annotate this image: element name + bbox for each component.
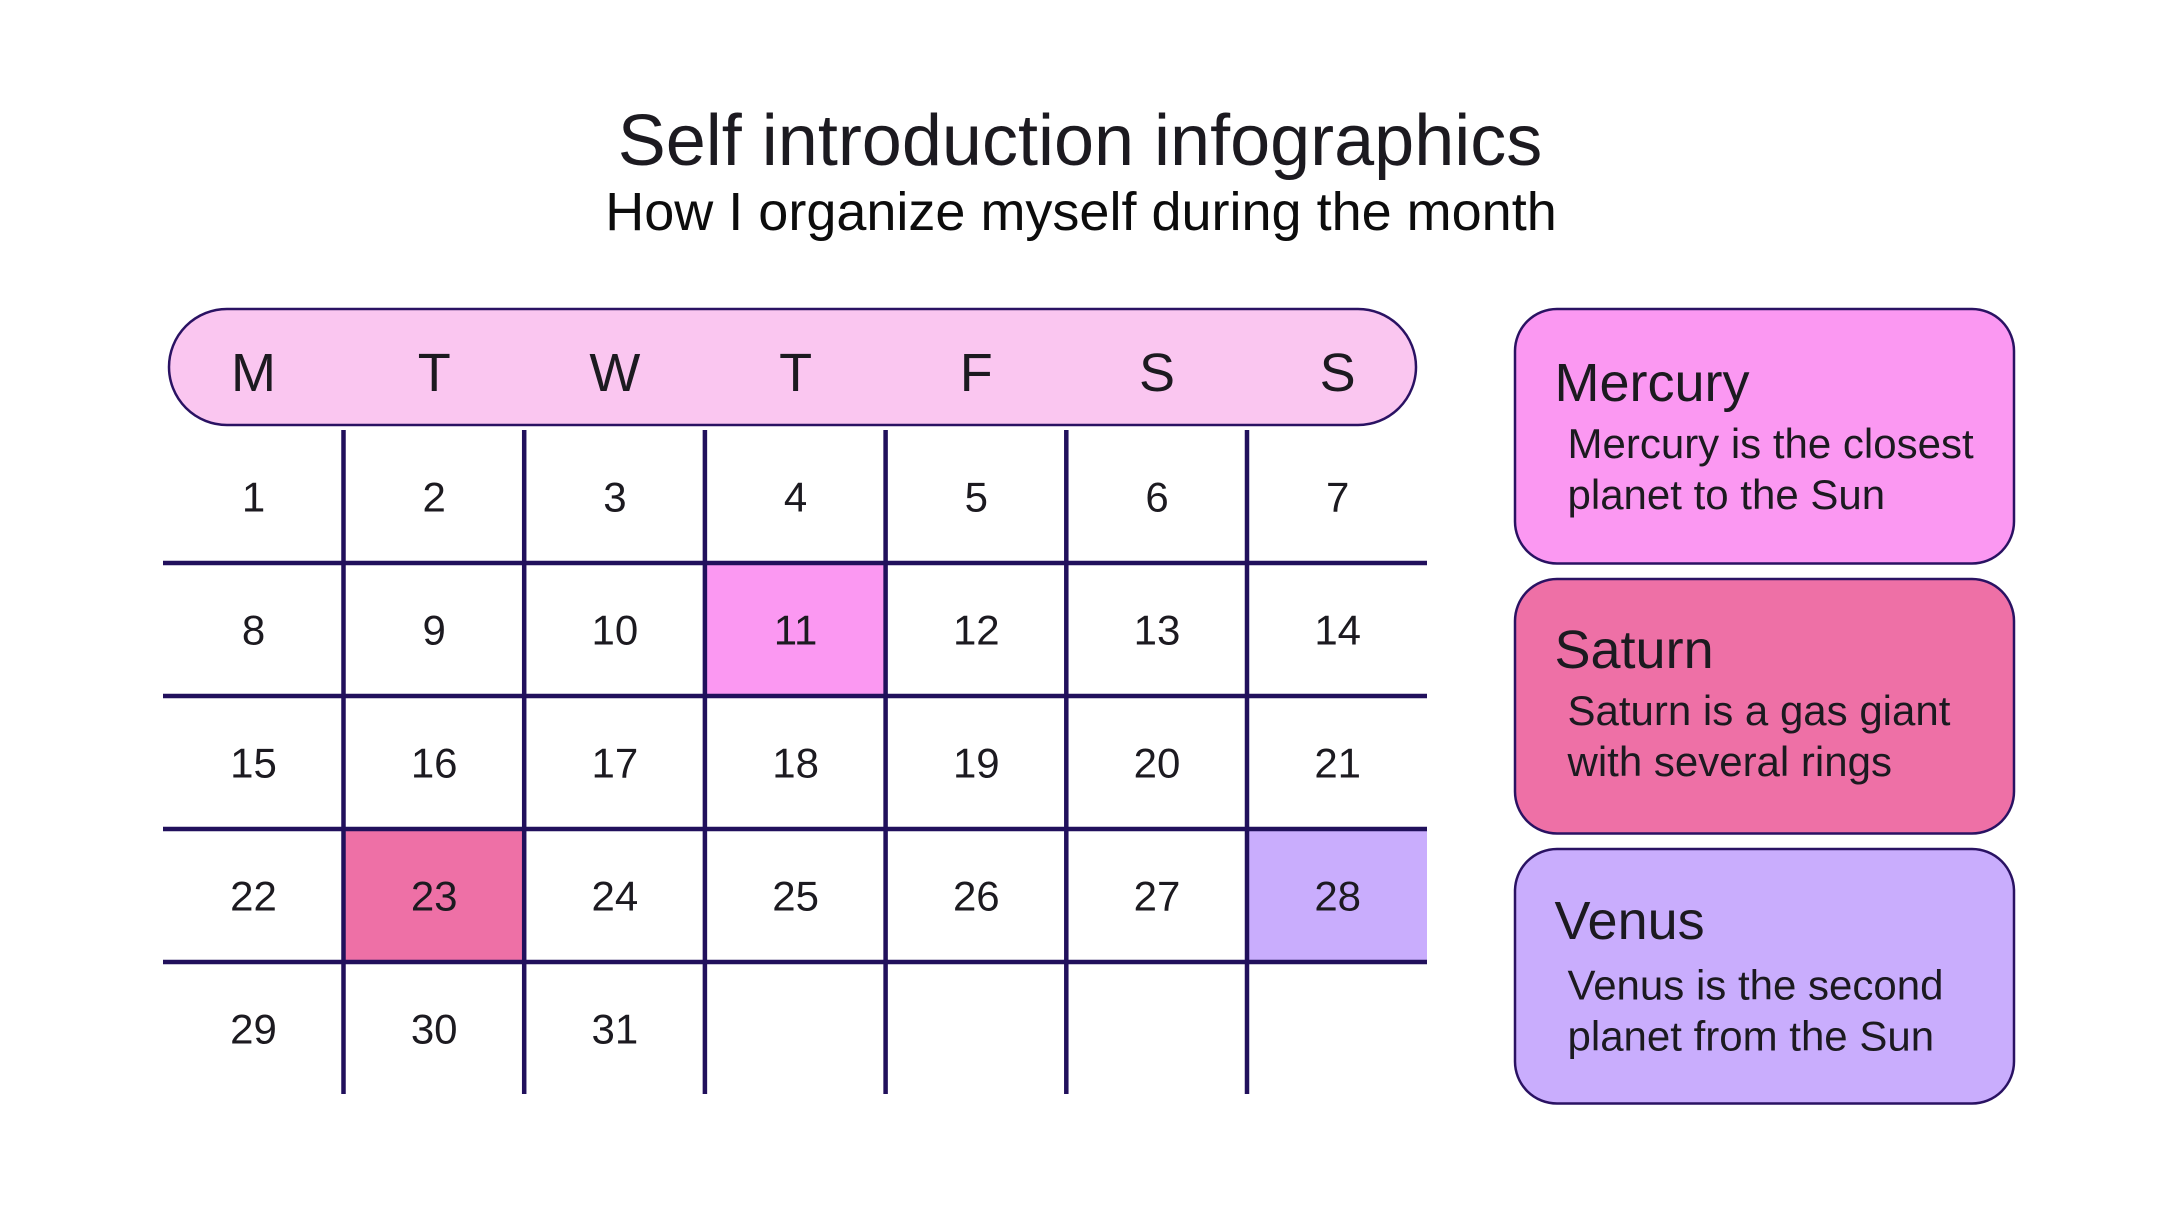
- day numbers: 17: [592, 740, 638, 786]
- weekday header pill: M: [231, 343, 276, 403]
- day numbers: 3: [603, 474, 627, 520]
- day numbers: 13: [1134, 606, 1180, 654]
- day numbers: 25: [772, 872, 819, 920]
- day numbers: 21: [1314, 740, 1361, 786]
- panel: Venus: Venus: [1554, 891, 1705, 951]
- panel: Venus: planet from the Sun: [1568, 1012, 1934, 1060]
- day numbers: 27: [1134, 872, 1180, 920]
- day numbers: 23: [411, 872, 458, 920]
- day numbers: 31: [592, 1006, 638, 1052]
- panel: Mercury: Mercury: [1554, 353, 1750, 413]
- calendar: [163, 309, 1427, 1094]
- day numbers: 15: [230, 740, 277, 786]
- panel: Venus: Venus is the second: [1568, 962, 1943, 1008]
- day numbers: 5: [965, 474, 988, 520]
- day numbers: 24: [592, 872, 638, 920]
- weekday header pill: F: [960, 343, 993, 403]
- panel: Mercury: [1515, 309, 2014, 564]
- day numbers: 19: [953, 740, 1000, 786]
- day numbers: 30: [411, 1006, 458, 1052]
- day numbers: 8: [242, 606, 265, 654]
- title: Self introduction infographics: [618, 101, 1542, 181]
- weekday header pill: T: [418, 343, 451, 403]
- day numbers: 20: [1134, 740, 1180, 786]
- panel: Saturn: [1515, 579, 2014, 834]
- weekday header pill: S: [1139, 343, 1175, 403]
- panel: Mercury: planet to the Sun: [1568, 471, 1885, 518]
- day numbers: 14: [1314, 606, 1361, 654]
- day numbers: 28: [1314, 872, 1361, 920]
- calendar grid lines: [163, 430, 1427, 1094]
- weekday header pill: [169, 309, 1416, 425]
- weekday header pill: T: [779, 343, 812, 403]
- subtitle: How I organize myself during the month: [605, 182, 1557, 242]
- panel: Saturn: Saturn is a gas giant: [1568, 687, 1951, 734]
- highlighted day cells: [344, 563, 1427, 962]
- day numbers: 6: [1145, 474, 1169, 520]
- day numbers: 2: [423, 474, 446, 520]
- day numbers: 11: [774, 606, 817, 654]
- panel: Saturn: with several rings: [1566, 738, 1892, 785]
- day numbers: 26: [953, 872, 1000, 920]
- day numbers: 18: [772, 740, 819, 786]
- day numbers: 7: [1326, 474, 1349, 520]
- day numbers: 4: [784, 474, 807, 520]
- day numbers: 22: [230, 872, 277, 920]
- panel: Saturn: Saturn: [1554, 620, 1714, 680]
- weekday header pill: S: [1320, 343, 1356, 403]
- weekday header pill: W: [589, 343, 640, 403]
- day numbers: 29: [230, 1006, 277, 1052]
- day numbers: 9: [423, 606, 446, 654]
- day numbers: 10: [592, 606, 638, 654]
- panel: Venus: [1515, 849, 2014, 1104]
- day numbers: 1: [242, 474, 265, 520]
- day numbers: 12: [953, 606, 1000, 654]
- day numbers: 16: [411, 740, 458, 786]
- day numbers: [230, 474, 1361, 1052]
- panel: Mercury: Mercury is the closest: [1568, 420, 1974, 467]
